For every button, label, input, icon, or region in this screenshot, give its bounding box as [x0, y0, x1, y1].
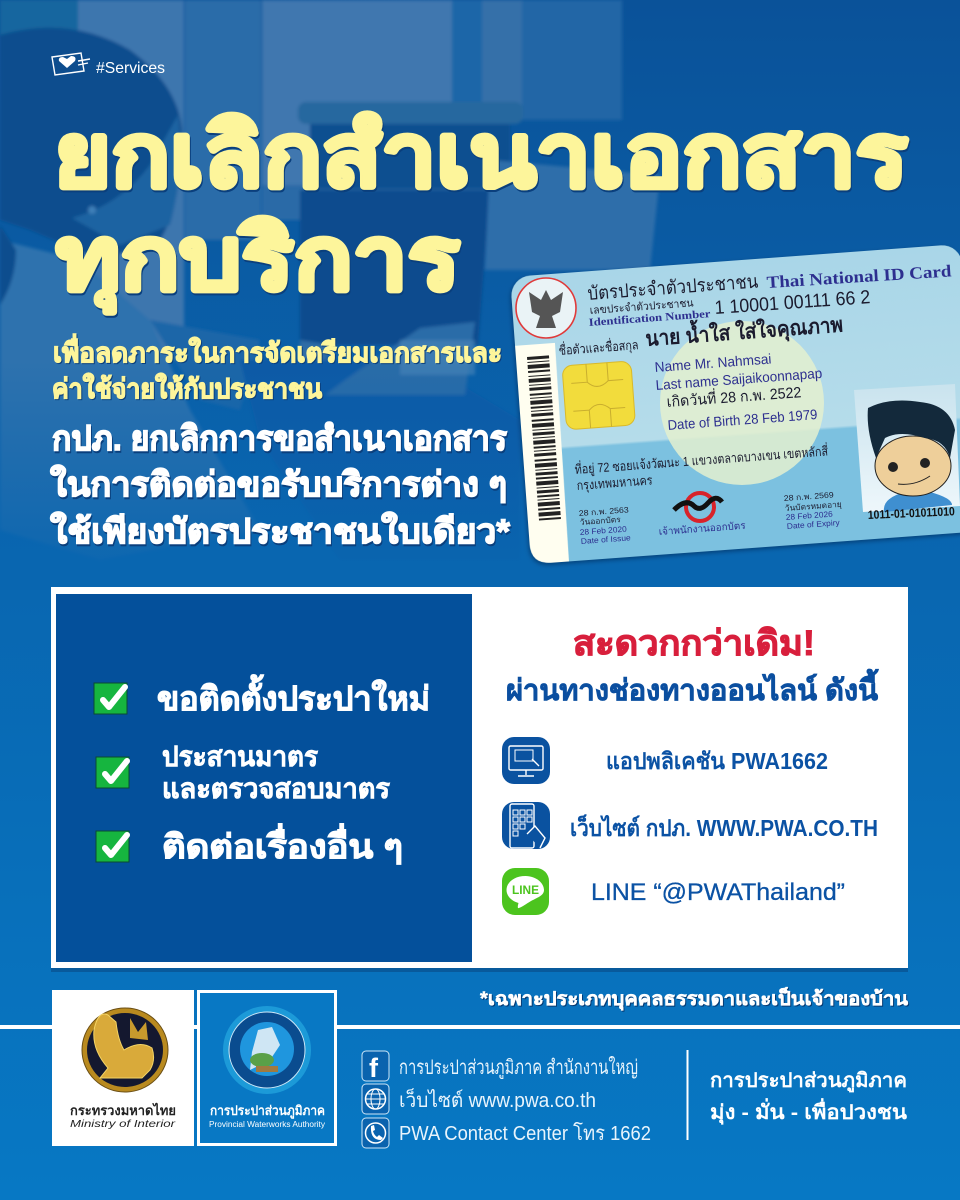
card hologram circle	[660, 321, 824, 485]
heading: blue: ผ่านทางช่องทางออนไลน์ ดังนี้	[506, 668, 879, 707]
service 1: ขอติดตั้งประปาใหม่	[157, 674, 430, 717]
card chip	[562, 361, 636, 430]
card texts: เกิดวันที่ 28 ก.พ. 2522	[666, 381, 802, 411]
Thai national ID card	[510, 244, 960, 564]
logo: Ministry of Interior	[52, 990, 194, 1146]
app label: แอปพลิเคชัน PWA1662	[606, 748, 828, 774]
slogan: มุ่ง - มั่น - เพื่อปวงชน	[710, 1097, 907, 1125]
subtitle: yellow: เพื่อลดภาระในการจัดเตรียมเอกสารและ	[53, 333, 502, 368]
title	[54, 106, 908, 314]
footnote: *เฉพาะประเภทบุคคลธรรมดาและเป็นเจ้าของบ้าน	[480, 986, 908, 1011]
card texts: Date of Birth 28 Feb 1979	[667, 406, 818, 433]
card texts: ชื่อตัวและชื่อสกุล	[558, 336, 639, 359]
card texts: 28 Feb 2026	[785, 510, 834, 522]
subtitle: yellow	[52, 333, 502, 404]
slogan	[710, 1070, 907, 1125]
facebook label: การประปาส่วนภูมิภาค สำนักงานใหญ่	[399, 1056, 638, 1080]
icon: phone	[362, 1118, 389, 1148]
card texts: Date of Issue	[580, 533, 632, 546]
service 3: ติดต่อเรื่องอื่น ๆ	[162, 823, 403, 865]
card texts: 28 ก.พ. 2563	[578, 505, 630, 518]
icon: facebook: f	[369, 1053, 379, 1083]
card texts: 28 Feb 2020	[579, 525, 628, 537]
card texts: 28 ก.พ. 2569	[783, 490, 835, 503]
logo: Provincial Waterworks Authority: Provincial Waterworks Authority	[209, 1120, 325, 1129]
hashtag label: #Services	[96, 60, 165, 77]
title: ยกเลิกสำเนาเอกสาร	[54, 106, 908, 205]
panel: services	[51, 587, 908, 972]
title: ทุกบริการ	[56, 209, 460, 314]
service 2: ประสานมาตร	[162, 741, 318, 772]
icon: LINE	[502, 868, 549, 915]
card texts: กรุงเทพมหานคร	[576, 472, 653, 494]
icon: computer	[502, 737, 550, 784]
website label: เว็บไซต์ www.pwa.co.th	[399, 1087, 596, 1112]
contact list	[362, 1051, 651, 1148]
card texts: เจ้าพนักงานออกบัตร	[658, 520, 747, 538]
contact center label: PWA Contact Center โทร 1662	[399, 1122, 651, 1145]
card texts: Thai National ID Card	[766, 261, 952, 292]
service 2: และตรวจสอบมาตร	[162, 773, 390, 804]
service 2	[162, 741, 390, 804]
card texts: นาย น้ำใส ใส่ใจคุณภาพ	[644, 309, 844, 353]
check 1	[94, 683, 127, 714]
logo: Ministry of Interior: Ministry of Interior	[70, 1118, 176, 1130]
card texts: Last name Saijaikoonnapap	[655, 365, 823, 393]
icon: tablet	[502, 802, 550, 849]
card body	[510, 244, 960, 564]
panel: service list	[56, 594, 472, 962]
check 3	[96, 831, 129, 862]
icon: card with heart	[52, 53, 90, 75]
card barcode	[527, 355, 561, 521]
check 2	[96, 757, 129, 788]
logo: Ministry of Interior: กระทรวงมหาดไทย	[70, 1102, 176, 1118]
card texts: 1 10001 00111 66 2	[714, 287, 871, 319]
card texts: บัตรประจำตัวประชาชน	[587, 272, 759, 305]
icon: LINE: LINE	[512, 885, 539, 897]
card texts: Date of Expiry	[786, 518, 840, 531]
subtitle: yellow: ค่าใช้จ่ายให้กับประชาชน	[52, 373, 322, 404]
slogan: การประปาส่วนภูมิภาค	[710, 1070, 907, 1094]
card texts: ที่อยู่ 72 ซอยแจ้งวัฒนะ 1 แขวงตลาดบางเขน เขตหลักสี่	[574, 442, 829, 478]
LINE label: LINE “@PWAThailand”	[591, 879, 845, 906]
card texts	[558, 261, 952, 546]
card texts: Name Mr. Nahmsai	[654, 350, 772, 375]
footer line	[0, 1025, 960, 1029]
card portrait	[854, 384, 960, 512]
body text: white: ในการติดต่อขอรับบริการต่าง ๆ	[50, 464, 507, 504]
card signature stamp	[674, 493, 722, 521]
card texts: วันบัตรหมดอายุ	[784, 500, 842, 513]
card texts: วันออกบัตร	[579, 515, 622, 527]
body text: white	[50, 420, 511, 551]
icon: globe	[362, 1084, 389, 1114]
body text: white: กปภ. ยกเลิกการขอสำเนาเอกสาร	[52, 420, 508, 458]
card texts: เลขประจำตัวประชาชน	[589, 297, 694, 317]
website label: เว็บไซต์ กปภ. WWW.PWA.CO.TH	[570, 813, 878, 841]
card coat of arms	[516, 278, 576, 338]
divider	[686, 1050, 688, 1140]
logo: Provincial Waterworks Authority	[198, 992, 336, 1144]
icon: facebook	[362, 1051, 389, 1083]
logo: Provincial Waterworks Authority: การประปาส่วนภูมิภาค	[210, 1103, 325, 1119]
card texts: Identification Number	[588, 308, 711, 329]
heading: red: สะดวกกว่าเดิม!	[573, 624, 815, 663]
body text: white: ใช้เพียงบัตรประชาชนใบเดียว*	[50, 511, 511, 551]
